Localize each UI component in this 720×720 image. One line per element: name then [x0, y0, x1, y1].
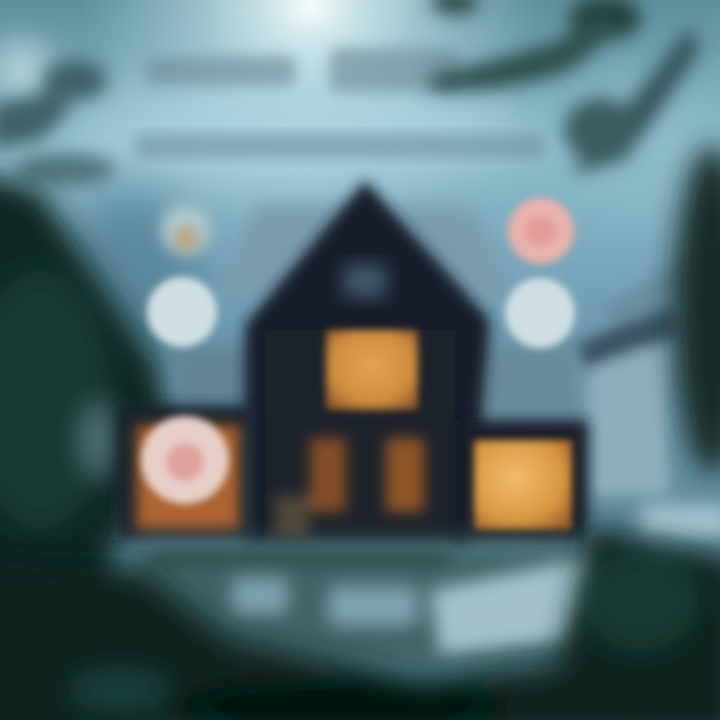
side roofs: [175, 205, 575, 415]
left wing with lit window: [118, 405, 253, 540]
house body and gable: [245, 180, 490, 545]
icon: top left circle: [161, 205, 211, 255]
right dark tree: [674, 145, 720, 475]
blurred title line: [145, 48, 460, 92]
left branch foliage: [0, 60, 115, 186]
right wing with lit window: [460, 420, 588, 542]
icon: lower left circle: [141, 416, 229, 504]
callout circles: [141, 198, 575, 504]
upper glowing window: [326, 330, 418, 410]
blurred subtitle line: [135, 134, 545, 158]
top branch foliage: [430, 0, 700, 175]
house: [118, 180, 588, 545]
icon: top right circle: [508, 198, 574, 264]
background house on the right: [575, 255, 690, 495]
icon: middle left circle: [147, 277, 217, 347]
glowing door panels: [275, 438, 424, 540]
foreground foliage: [0, 525, 720, 720]
attic window: [343, 264, 387, 298]
icon: middle right circle: [505, 278, 575, 348]
left dark foliage mass: [0, 170, 170, 720]
foreground lawn patches: [130, 505, 720, 665]
